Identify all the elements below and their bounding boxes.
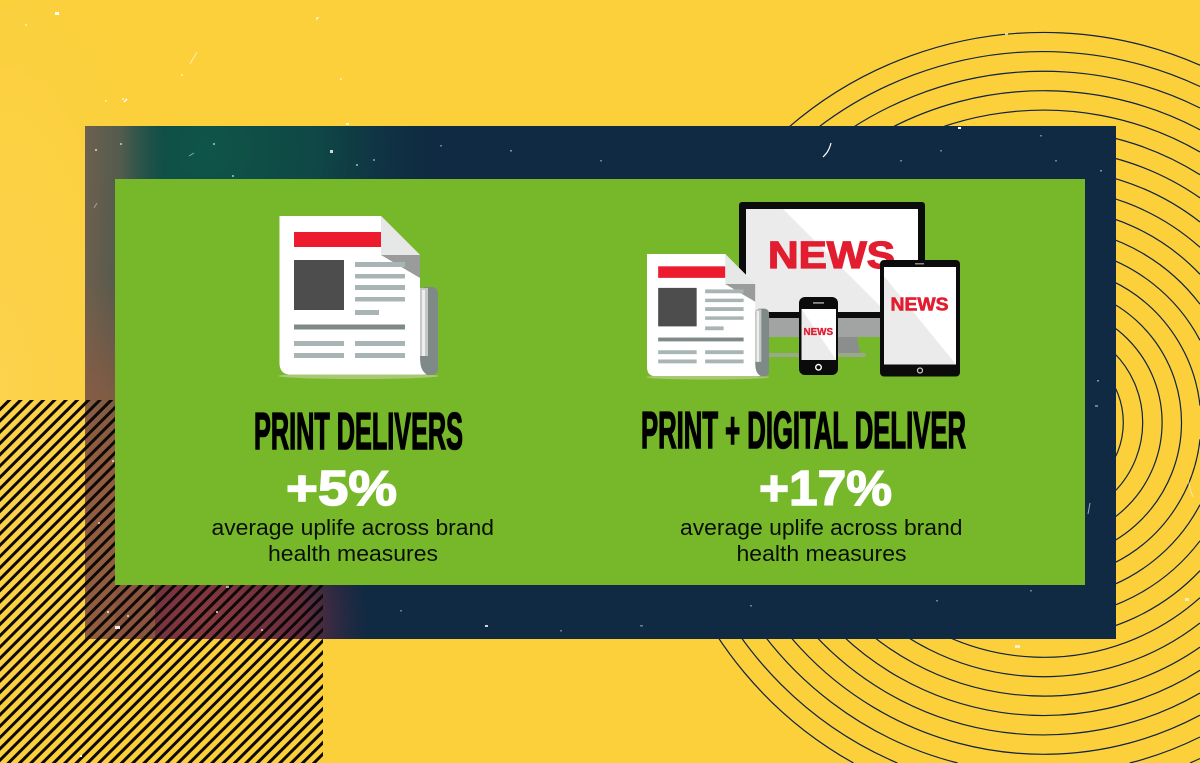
text: print + digital description: health measures: [736, 541, 906, 566]
text: print + digital description: [680, 515, 962, 566]
monitor screen: [746, 209, 918, 312]
concentric circles pattern: [654, 32, 1200, 763]
monitor frame: [739, 202, 925, 318]
text: print description: [212, 515, 494, 566]
text: print description: health measures: [268, 541, 438, 566]
icon: monitor: [739, 202, 925, 357]
stat: +5%: +5%: [286, 462, 397, 516]
icon: tablet: [880, 260, 960, 376]
page fold: [381, 216, 420, 278]
newspaper page: [280, 216, 427, 374]
stat: +17%: +17%: [759, 462, 892, 516]
monitor stand: [768, 318, 881, 357]
newspaper shadow: [278, 373, 438, 379]
icon: tablet: NEWS: [890, 295, 948, 315]
red masthead: [294, 232, 381, 247]
diagonal hatch square: [0, 400, 323, 763]
icon: phone: [799, 297, 838, 375]
text: print + digital description: average uplife across brand: [680, 515, 962, 540]
monitor news label: NEWS: [768, 235, 895, 277]
newspaper roll: [420, 287, 438, 375]
dark gradient panel: [85, 126, 1116, 639]
infographic canvas: PRINT DELIVERS: [254, 403, 463, 461]
icon: newspaper (print): [278, 216, 438, 379]
text: print description: average uplife across brand: [212, 515, 494, 540]
text lines: [294, 262, 405, 358]
icon: phone: NEWS: [804, 327, 833, 338]
icon: newspaper (print + digital): [646, 254, 769, 380]
photo block: [294, 260, 344, 310]
green content panel: [115, 179, 1085, 585]
